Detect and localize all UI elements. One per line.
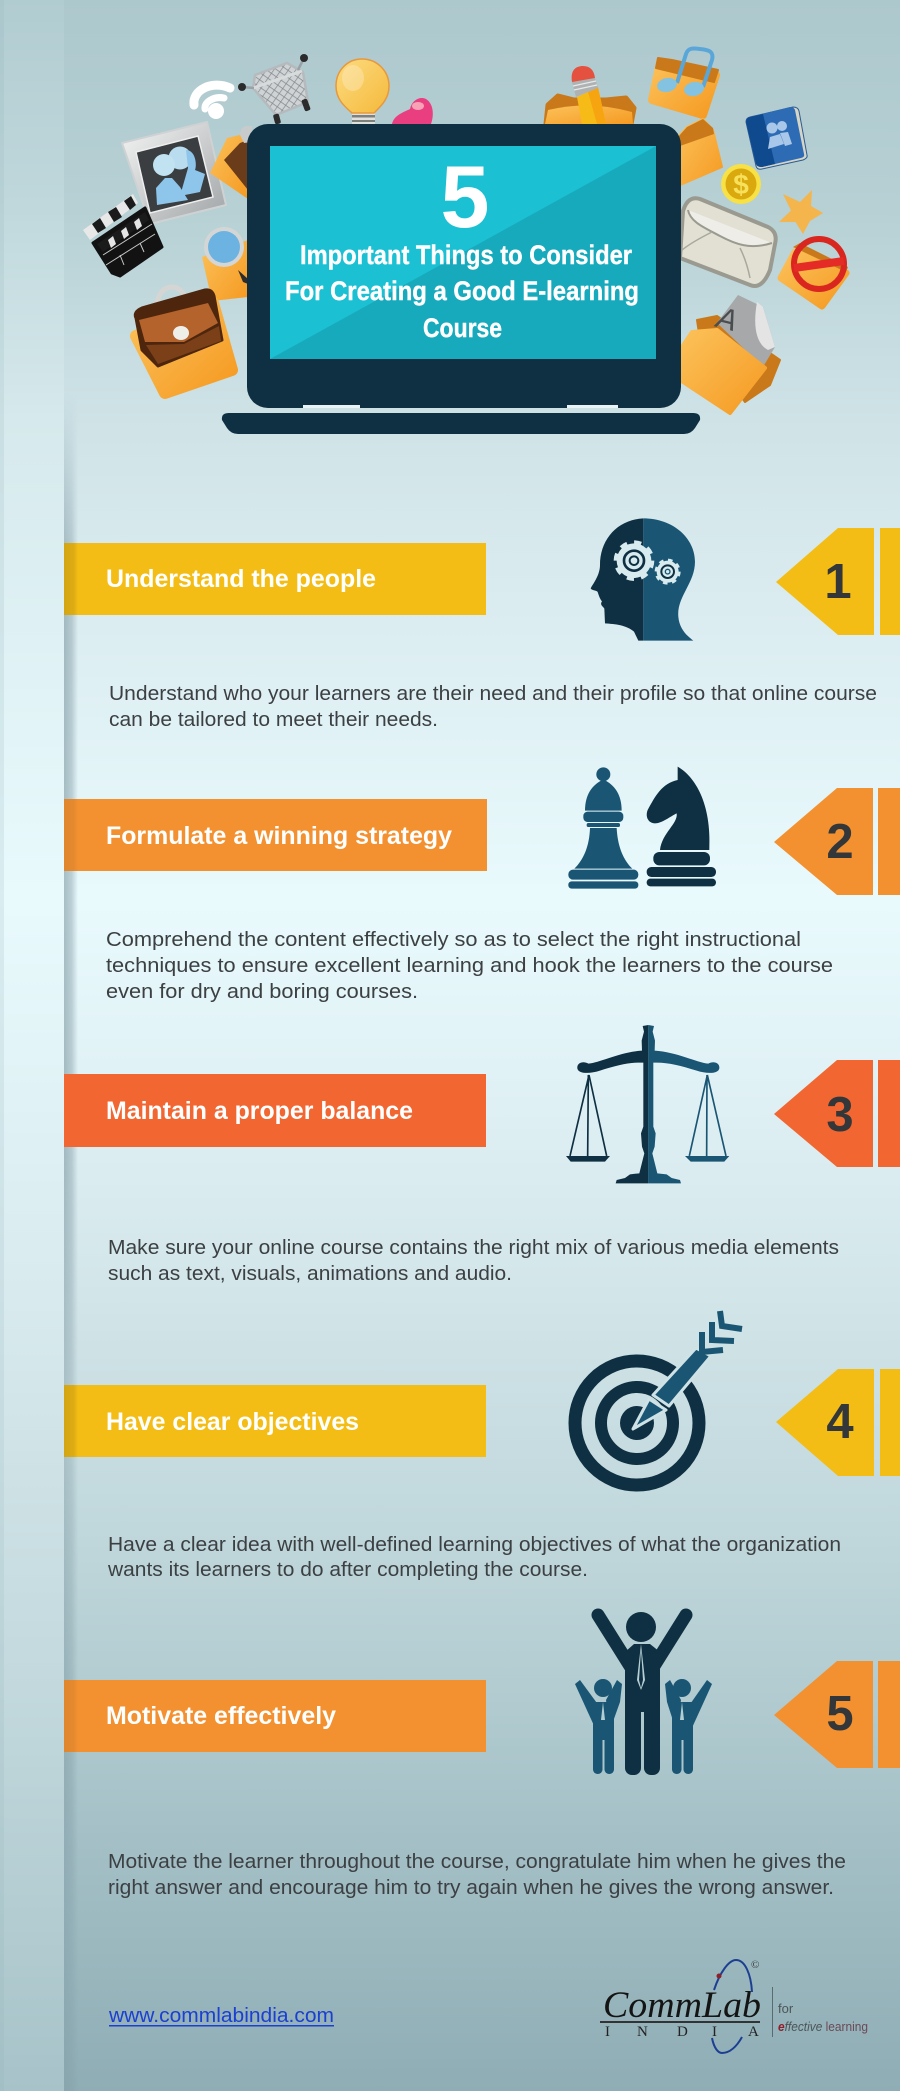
icon: three cheering people (575, 1612, 712, 1775)
number arrow (774, 1060, 900, 1167)
icon: folder with document A (680, 295, 780, 413)
section 1: understand the people (64, 518, 900, 731)
description (109, 683, 877, 731)
icon: photo frame with people (122, 122, 226, 224)
icon: heart (392, 98, 433, 124)
logo: CommLab India: A (748, 2024, 759, 2040)
logo: CommLab India: effective learning (778, 2019, 868, 2034)
icon: wifi (194, 85, 230, 119)
description: right answer and encourage him to try again when he gives the wrong answer. (108, 1877, 834, 1899)
laptop body (247, 124, 681, 408)
title: Course (423, 313, 502, 343)
icon: chess pieces (568, 767, 716, 889)
icon: dollar coin (721, 164, 761, 204)
heading bar: Maintain a proper balance (106, 1097, 413, 1125)
title: Important Things to Consider (300, 240, 632, 270)
description (106, 929, 833, 1003)
number arrow (776, 1369, 900, 1476)
description: can be tailored to meet their needs. (109, 709, 438, 731)
icon: head with gears (591, 518, 695, 641)
laptop base (222, 413, 700, 434)
heading bar (64, 1680, 486, 1752)
icon: folder with no-entry sign (781, 239, 848, 306)
logo: CommLab India (600, 1959, 868, 2053)
heading bar: Motivate effectively (106, 1702, 336, 1730)
logo: CommLab India: I (712, 2024, 717, 2040)
heading bar (64, 1385, 486, 1457)
icon: folder with briefcase (135, 287, 232, 393)
bishop (568, 767, 638, 889)
section 5: motivate effectively (64, 1612, 900, 1899)
icon: light bulb (336, 59, 389, 124)
logo: CommLab India: I (605, 2024, 610, 2040)
logo: CommLab India: for (778, 2001, 794, 2016)
heading bar: Have clear objectives (106, 1408, 359, 1436)
description: Comprehend the content effectively so as to select the right instructional (106, 929, 801, 951)
logo: CommLab India: © (751, 1959, 759, 1971)
number arrow (774, 788, 900, 895)
number arrow: 2 (826, 815, 854, 869)
icon: star (779, 190, 823, 234)
heading bar (64, 1074, 486, 1147)
description: Understand who your learners are their need and their profile so that online course (109, 683, 877, 705)
description: Motivate the learner throughout the course, congratulate him when he gives the (108, 1851, 846, 1873)
laptop screen (270, 146, 656, 359)
heading bar: Formulate a winning strategy (106, 822, 452, 850)
description: Make sure your online course contains the right mix of various media elements (108, 1237, 839, 1259)
number arrow: 1 (824, 555, 852, 609)
title: 5 (441, 147, 489, 246)
header illustration: floating icons and laptop (83, 49, 848, 434)
icon: folder with magnifier (202, 227, 248, 301)
logo: CommLab India: CommLab (603, 1985, 761, 2026)
icon: film clapperboard (83, 194, 162, 276)
number arrow (774, 1661, 900, 1768)
knight (647, 767, 716, 886)
icon: folder with music note (652, 49, 718, 115)
section 2: formulate a winning strategy (64, 767, 900, 1003)
icon: dollar coin: $ (733, 169, 749, 200)
icon: envelope (680, 198, 776, 286)
icon: shopping cart (238, 54, 311, 125)
title (285, 147, 639, 343)
description (108, 1237, 839, 1285)
icon: folder with pencil (545, 66, 634, 124)
icon: folder with brown case (210, 126, 252, 199)
description: wants its learners to do after completing the course. (107, 1559, 588, 1581)
description: Have a clear idea with well-defined learning objectives of what the organization (108, 1534, 841, 1556)
icon: blue address book (746, 107, 807, 169)
description: even for dry and boring courses. (106, 981, 418, 1003)
description (108, 1851, 846, 1899)
number arrow: 4 (826, 1395, 854, 1449)
logo: CommLab India: D (677, 2024, 688, 2040)
icon: orange folder (678, 119, 722, 186)
description (107, 1534, 841, 1581)
heading bar: Understand the people (106, 565, 376, 593)
description: techniques to ensure excellent learning and hook the learners to the course (106, 955, 833, 977)
website link: www.commlabindia.com (108, 2005, 334, 2027)
number arrow (776, 528, 900, 635)
description: such as text, visuals, animations and audio. (108, 1263, 512, 1285)
number arrow: 5 (826, 1687, 854, 1741)
number arrow: 3 (826, 1088, 854, 1142)
section 4: have clear objectives (64, 1311, 900, 1581)
logo: CommLab India: N (637, 2024, 648, 2040)
heading bar (64, 799, 487, 871)
icon: balance scales (566, 1025, 729, 1183)
section 3: maintain a proper balance (64, 1025, 900, 1285)
title: For Creating a Good E-learning (285, 276, 639, 306)
laptop hinges (303, 405, 618, 408)
heading bar (64, 543, 486, 615)
icon: folder with document A: A (711, 301, 741, 338)
icon: target with arrow (575, 1311, 742, 1485)
